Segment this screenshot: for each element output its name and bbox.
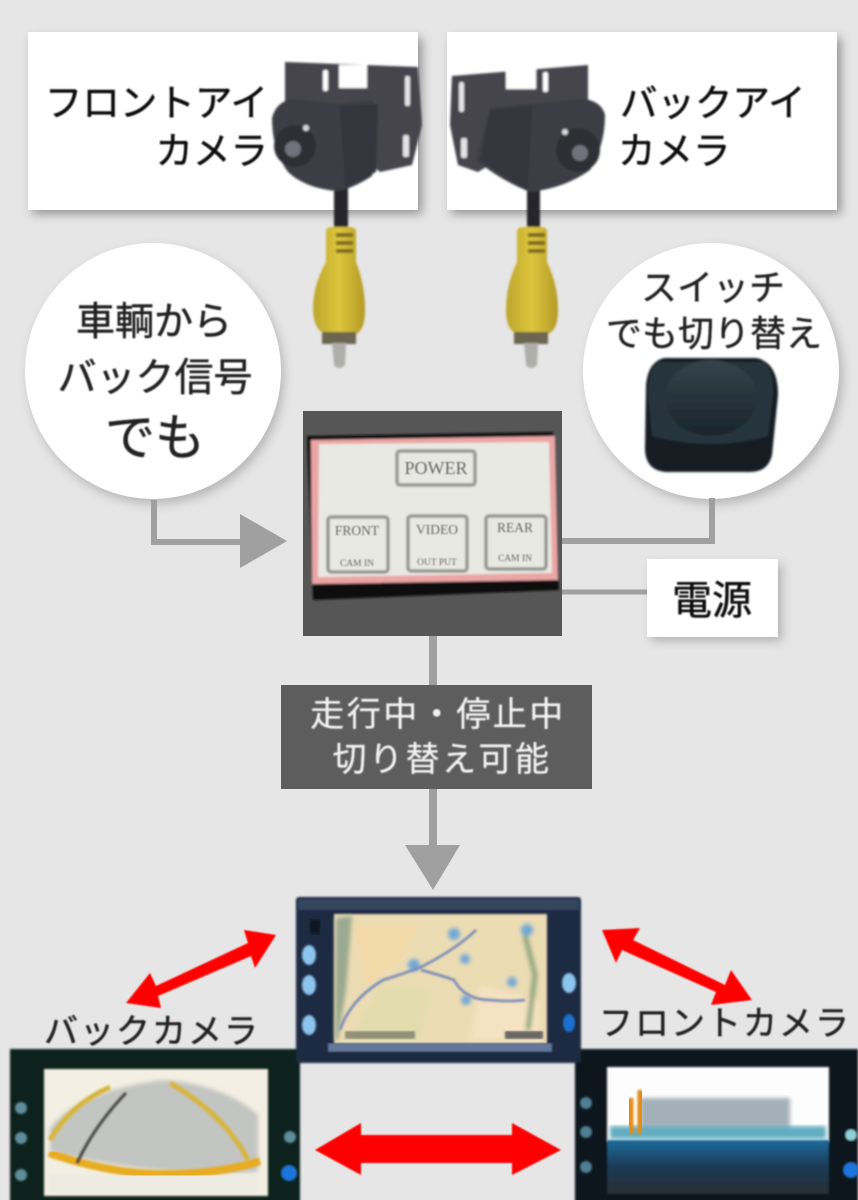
heading: front camera: フロントカメラ — [599, 1005, 851, 1043]
label: switchable while driving or stopped: 切り替え可能 — [332, 741, 552, 779]
arrow: monitor to back camera — [126, 930, 276, 1008]
arrow: between back and front camera — [315, 1123, 561, 1175]
callout: vehicle reverse signal — [25, 243, 284, 504]
label: switchable while driving or stopped — [281, 685, 592, 789]
panel: back eye camera — [447, 32, 841, 214]
unit labels: POWER — [404, 458, 468, 478]
unit labels: CAM IN — [340, 559, 374, 569]
arrow: down to monitor — [405, 789, 460, 890]
panel: control unit — [303, 411, 562, 636]
panel: front eye camera — [28, 32, 422, 214]
heading: back eye camera: バックアイ — [620, 82, 806, 124]
callout: switch: スイッチ — [641, 267, 785, 308]
heading: back camera: バックカメラ — [44, 1013, 260, 1051]
panel: front camera monitor — [575, 1049, 858, 1200]
panel: navigation monitor — [296, 897, 581, 1063]
unit labels: FRONT — [335, 523, 380, 538]
unit labels — [335, 458, 533, 569]
icon: front camera with RCA plug — [272, 62, 422, 368]
heading: back eye camera: カメラ — [618, 130, 730, 172]
unit labels: VIDEO — [416, 522, 458, 537]
map roads and water — [335, 916, 540, 1040]
panel: back camera monitor — [10, 1049, 300, 1200]
callout: switch — [583, 243, 843, 504]
unit labels: REAR — [497, 520, 533, 535]
arrow: reverse signal to control unit — [154, 500, 287, 568]
label: power — [647, 559, 782, 641]
icon: back camera with RCA plug — [450, 65, 605, 368]
connector: power to control unit — [560, 590, 650, 594]
heading: front eye camera: フロントアイ — [45, 82, 268, 124]
heading: front eye camera: カメラ — [156, 130, 268, 172]
unit labels: CAM IN — [498, 554, 532, 564]
callout: switch: でも切り替え — [606, 313, 822, 354]
callout: vehicle reverse signal: バック信号 — [57, 357, 253, 400]
label: power: 電源 — [672, 579, 752, 623]
connector: switch to control unit — [560, 498, 712, 541]
callout: vehicle reverse signal: 車輌から — [76, 301, 232, 344]
label: switchable while driving or stopped: 走行中・停止中 — [310, 696, 566, 734]
arrow: monitor to front camera — [602, 928, 752, 1005]
callout: vehicle reverse signal: でも — [105, 410, 205, 466]
connector: control unit to switching label — [429, 636, 437, 686]
unit labels: OUT PUT — [417, 558, 457, 568]
icon: push switch — [645, 358, 778, 472]
